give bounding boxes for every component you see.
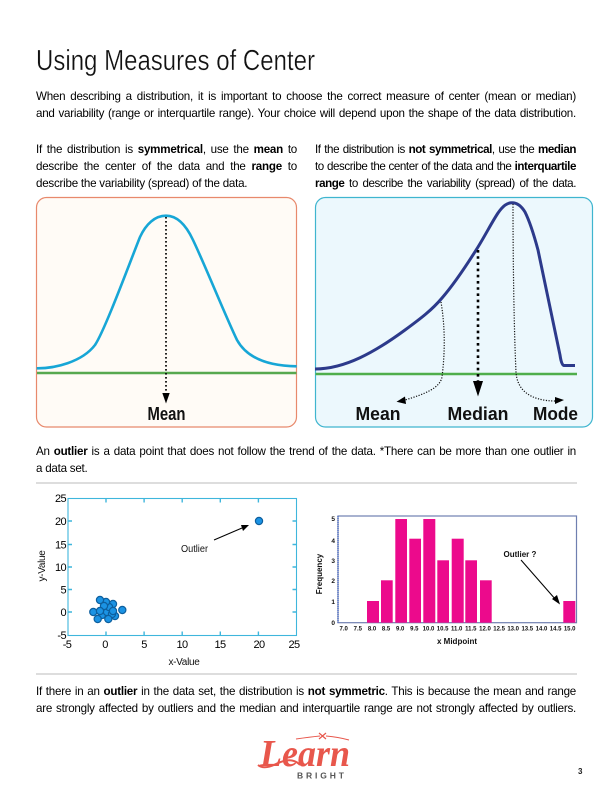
histogram: Outlier ? <box>504 550 537 559</box>
histogram: 11.0 <box>451 626 463 632</box>
scatter plot: 5 <box>60 584 66 596</box>
histogram: x Midpoint <box>437 637 477 646</box>
text: non-symmetrical rule: range to describe the variability (spread) of the data. <box>315 177 576 190</box>
panel: skewed distribution: Mean <box>356 403 400 424</box>
scatter plot: 25 <box>55 493 66 505</box>
text: non-symmetrical rule: to describe the center of the data and the interquartile <box>315 160 576 173</box>
panel: symmetric distribution: Mean <box>148 404 186 424</box>
logo: Learn Bright: BRIGHT <box>297 770 345 780</box>
histogram: 8.0 <box>368 626 377 632</box>
scatter plot: 15 <box>214 639 226 651</box>
page number: 3 <box>578 767 583 776</box>
text: non-symmetrical rule <box>315 143 576 190</box>
histogram: Frequency <box>315 553 324 594</box>
histogram: 7.0 <box>340 626 349 632</box>
histogram: 14.5 <box>550 626 562 632</box>
text: outlier definition <box>36 445 576 475</box>
histogram: 13.0 <box>507 626 520 632</box>
scatter plot: 20 <box>55 516 66 528</box>
histogram: 1 <box>331 599 335 606</box>
scatter plot: 10 <box>55 562 66 574</box>
scatter plot: x-Value <box>168 657 200 668</box>
text: symmetrical rule: describe the center of the data and the range to <box>36 160 297 173</box>
histogram: 15.0 <box>564 626 576 632</box>
panel: skewed distribution <box>314 196 594 428</box>
scatter plot: Outlier <box>181 544 209 555</box>
panel: skewed distribution: Mode <box>533 403 578 424</box>
intro text: When describing a distribution, it is important to choose the correct measure of center (mean or median) <box>36 90 576 103</box>
panel: skewed distribution: Median <box>448 403 508 424</box>
histogram: 9.0 <box>396 626 405 632</box>
text: symmetrical rule: describe the variability (spread) of the data. <box>36 177 247 190</box>
scatter plot: 10 <box>176 639 188 651</box>
histogram bars <box>367 519 575 623</box>
scatter plot: 15 <box>55 540 66 552</box>
histogram: 10.5 <box>437 626 449 632</box>
histogram: 12.5 <box>493 626 506 632</box>
scatter plot: y-Value <box>37 550 48 582</box>
text: outlier effect <box>36 685 576 715</box>
histogram: 0 <box>331 620 335 627</box>
scatter plot: 0 <box>60 607 66 619</box>
scatter points <box>90 517 263 623</box>
intro text: and variability (range or interquartile range). Your choice will depend upon the shape of the data distribution. <box>36 107 576 120</box>
title: Using Measures of Center <box>36 45 315 77</box>
logo: Learn Bright: Learn <box>259 733 350 775</box>
histogram: 4 <box>331 538 335 545</box>
text: outlier effect: are strongly affected by outliers and the median and interquartile range are not strongly affected by outliers. <box>36 702 576 715</box>
histogram: 13.5 <box>521 626 534 632</box>
histogram: 14.0 <box>536 626 548 632</box>
histogram: 12.0 <box>479 626 491 632</box>
scatter plot: -5 <box>57 630 66 642</box>
scatter plot: 20 <box>253 639 265 651</box>
histogram: 7.5 <box>354 626 363 632</box>
panel: symmetric distribution <box>36 196 298 428</box>
histogram: 10.0 <box>423 626 435 632</box>
text: outlier definition: An outlier is a data point that does not follow the trend of the data. *There can be more than one outlier in <box>36 445 576 458</box>
scatter plot: 25 <box>288 639 300 651</box>
text: symmetrical rule: If the distribution is symmetrical, use the mean to <box>36 143 297 156</box>
histogram: 9.5 <box>410 626 419 632</box>
text: outlier definition: a data set. <box>36 462 88 475</box>
intro text <box>36 90 576 120</box>
scatter plot: -5 <box>63 639 72 651</box>
histogram: 11.5 <box>465 626 477 632</box>
text: non-symmetrical rule: If the distribution is not symmetrical, use the median <box>315 143 576 156</box>
histogram: 2 <box>331 578 335 585</box>
histogram: 3 <box>331 558 335 565</box>
text: outlier effect: If there in an outlier in the data set, the distribution is not symmetric. This is because the mean and range <box>36 685 576 698</box>
scatter plot: 5 <box>141 639 147 651</box>
scatter plot: 0 <box>102 639 108 651</box>
histogram: 8.5 <box>382 626 391 632</box>
text: symmetrical rule <box>36 143 297 190</box>
histogram: 5 <box>331 516 335 523</box>
